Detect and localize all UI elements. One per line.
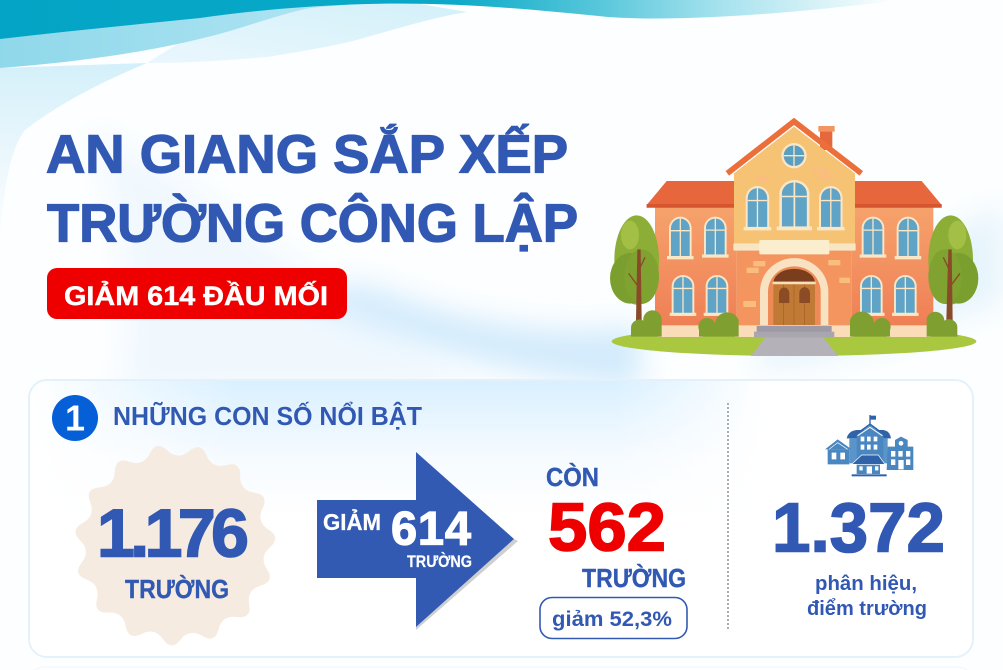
arrow: reduction of 614 schools: TRƯỜNG bbox=[407, 552, 472, 571]
stat: remaining schools: CÒN bbox=[546, 462, 599, 492]
stat: starting school count: TRƯỜNG bbox=[125, 574, 229, 604]
section heading: NHỮNG CON SỐ NỔI BẬT bbox=[113, 401, 422, 431]
title: AN GIANG SẮP XẾP bbox=[46, 124, 568, 184]
stat: branch campuses: phân hiệu, bbox=[815, 573, 917, 595]
stat: remaining schools bbox=[540, 462, 687, 638]
icon: school cluster bbox=[825, 415, 913, 476]
stat: branch campuses bbox=[772, 488, 945, 620]
next panel edge bbox=[29, 667, 973, 670]
stat: branch campuses: 1.372 bbox=[772, 488, 945, 566]
arrow: reduction of 614 schools: 614 bbox=[391, 502, 471, 554]
section number badge: 1 bbox=[65, 398, 85, 438]
title bbox=[46, 124, 578, 254]
top wave banner bbox=[0, 0, 900, 68]
background swooshes bbox=[0, 63, 1003, 390]
stat: remaining schools: TRƯỜNG bbox=[582, 563, 686, 593]
subtitle badge bbox=[47, 268, 347, 319]
stat: remaining schools: giảm 52,3% bbox=[552, 608, 672, 631]
panel: key figures bbox=[29, 380, 973, 657]
arrow: reduction of 614 schools: GIẢM bbox=[323, 507, 381, 535]
stat: remaining schools: 562 bbox=[548, 490, 666, 566]
stat: starting school count: 1.176 bbox=[97, 496, 249, 572]
section number badge bbox=[52, 395, 98, 441]
title: TRƯỜNG CÔNG LẬP bbox=[47, 192, 578, 254]
illustration: school building bbox=[610, 121, 978, 356]
subtitle badge: GIẢM 614 ĐẦU MỐI bbox=[64, 279, 328, 311]
arrow: reduction of 614 schools bbox=[317, 452, 518, 630]
stat: branch campuses: điểm trường bbox=[807, 598, 927, 620]
stat: starting school count bbox=[75, 446, 275, 646]
